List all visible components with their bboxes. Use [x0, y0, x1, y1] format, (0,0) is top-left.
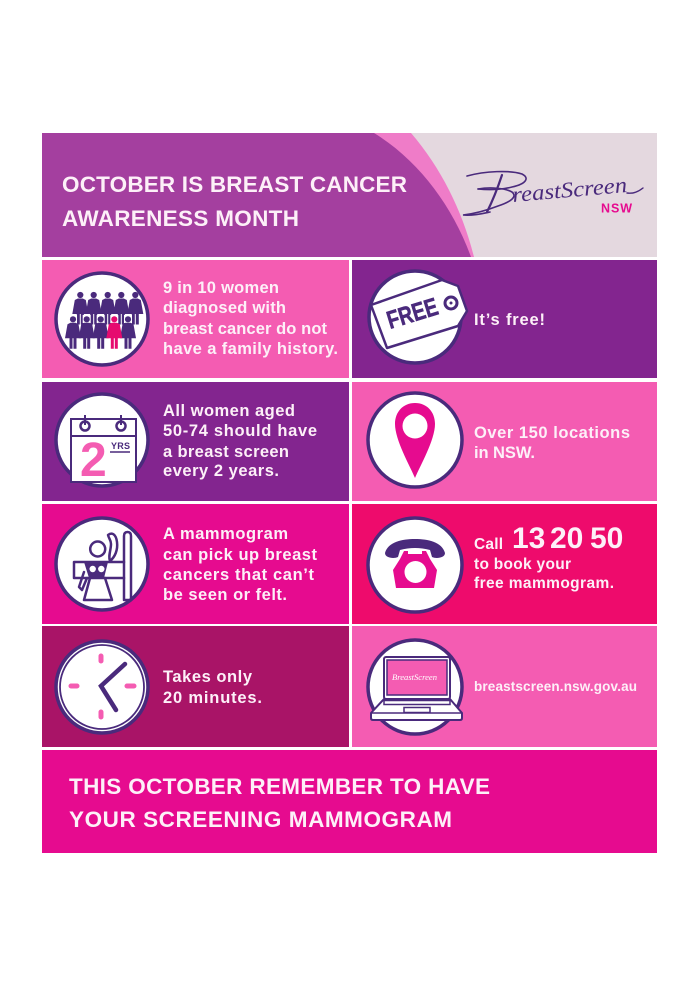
text: A mammogram — [163, 525, 288, 543]
panel: website — [352, 626, 657, 747]
icon: map pin — [368, 393, 462, 487]
text: 50-74 should have — [163, 422, 317, 440]
icon: calendar: 2 — [80, 434, 107, 487]
footer banner: YOUR SCREENING MAMMOGRAM — [69, 807, 452, 832]
panel: family history — [42, 260, 349, 378]
icon: free tag — [369, 271, 467, 363]
footer banner — [42, 750, 657, 853]
text: 13 — [512, 522, 545, 555]
text: diagnosed with — [163, 299, 286, 317]
text: 20 — [550, 522, 583, 555]
text: breastscreen.nsw.gov.au — [474, 679, 637, 694]
text: Call — [474, 536, 503, 553]
text: 9 in 10 women — [163, 279, 279, 297]
text: be seen or felt. — [163, 586, 287, 604]
icon: women — [56, 273, 148, 365]
panel: screening age — [42, 382, 349, 501]
text — [163, 525, 318, 604]
text — [474, 522, 623, 592]
title: AWARENESS MONTH — [62, 206, 299, 231]
text: Takes only — [163, 668, 253, 686]
text: breast cancer do not — [163, 320, 328, 338]
text — [163, 668, 262, 707]
text — [163, 279, 338, 358]
text: in NSW. — [474, 444, 535, 462]
logo: BreastScreen NSW: NSW — [601, 202, 632, 216]
header panel — [42, 133, 657, 257]
text: free mammogram. — [474, 575, 614, 592]
icon: calendar: YRS — [111, 441, 130, 451]
text: every 2 years. — [163, 462, 279, 480]
icon: laptop: BreastScreen — [392, 673, 437, 682]
panel: free — [352, 260, 657, 378]
icon: clock — [56, 641, 148, 733]
text — [474, 424, 630, 462]
text: It’s free! — [474, 311, 545, 329]
text: 50 — [590, 522, 623, 555]
title — [62, 172, 407, 231]
panel: locations — [352, 382, 657, 501]
panel: time — [42, 626, 349, 747]
icon: telephone — [368, 518, 462, 612]
icon: calendar — [56, 394, 148, 487]
footer banner: THIS OCTOBER REMEMBER TO HAVE — [69, 774, 490, 799]
icon: free tag: FREE — [384, 293, 441, 335]
text: can pick up breast — [163, 546, 318, 564]
logo: BreastScreen NSW: reastScreen — [511, 172, 628, 207]
panel: mammogram — [42, 504, 349, 624]
text: a breast screen — [163, 443, 289, 461]
logo: BreastScreen NSW — [463, 172, 643, 216]
text: All women aged — [163, 402, 295, 420]
text: have a family history. — [163, 340, 338, 358]
panel: call — [352, 504, 657, 624]
icon: laptop — [368, 640, 462, 734]
text: to book your — [474, 556, 571, 573]
text: 20 minutes. — [163, 689, 262, 707]
text — [163, 402, 317, 480]
icon: mammogram machine — [56, 518, 148, 610]
title: OCTOBER IS BREAST CANCER — [62, 172, 407, 197]
text: Over 150 locations — [474, 424, 630, 442]
text: cancers that can’t — [163, 566, 314, 584]
